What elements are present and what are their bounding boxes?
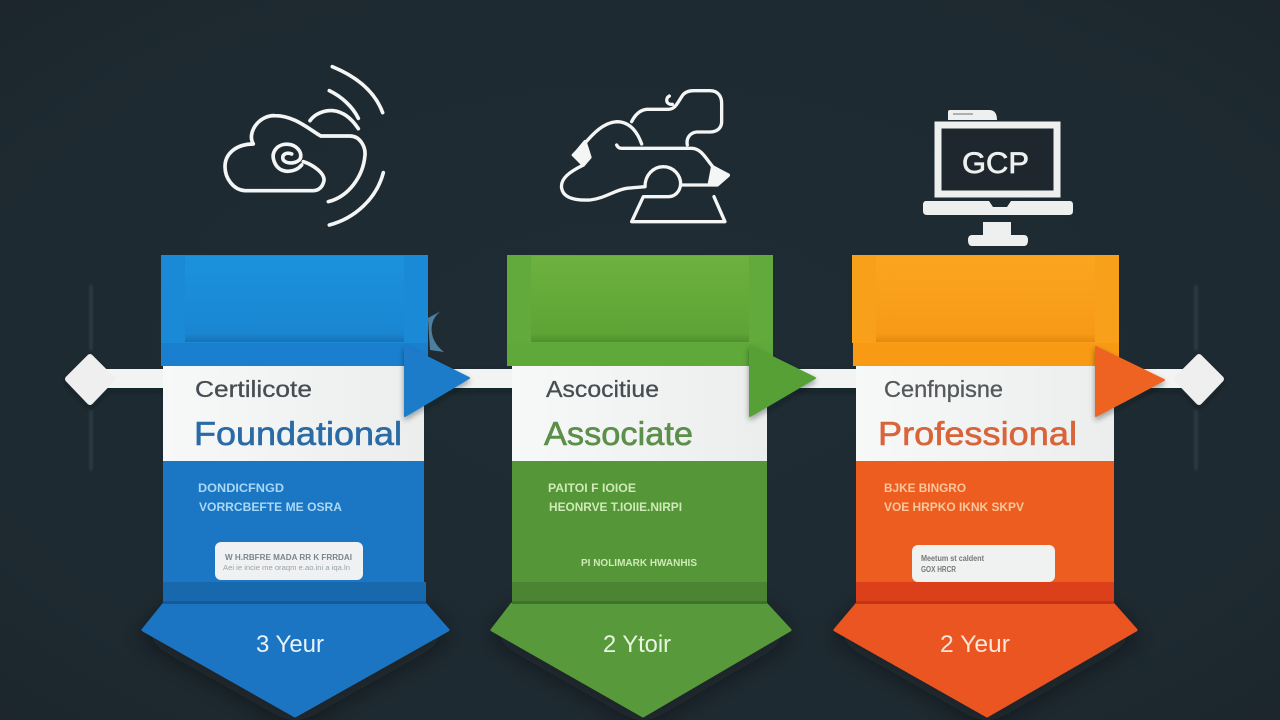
- note box: Aei ie incie me oraqm e.ao.ini a iqa.ln: [223, 565, 350, 572]
- arrow banner: 2 Year: 2 Ytoir: [603, 631, 671, 658]
- white label: [856, 366, 1114, 461]
- white label: [512, 366, 767, 461]
- monitor stand: [968, 222, 1028, 246]
- card: Foundational: VORRCBEFTE ME OSRA: [199, 500, 342, 514]
- level name: Foundational: [194, 415, 402, 452]
- arrow connector: [750, 346, 815, 416]
- description text: PAITOI F IOIOE: [548, 481, 636, 495]
- subtitle: Ascocitiue: [546, 376, 659, 402]
- arrow banner: 2 Year: 2 Yeur: [940, 631, 1010, 658]
- arrow banner: 2 Year: [835, 604, 1136, 716]
- description text: BJKE BINGRO: [884, 481, 966, 495]
- subtitle: Certilicote: [195, 376, 312, 402]
- lower panel: [512, 461, 767, 582]
- icon: abstract cloud and pedestal: [561, 91, 728, 222]
- icon: cloud with signal arcs: [225, 67, 383, 225]
- card: Foundational: [143, 255, 469, 716]
- card: Professional: [835, 255, 1164, 716]
- note text: PI NOLIMARK HWANHIS: [581, 558, 697, 569]
- top panel: [161, 255, 428, 343]
- note box: GOX HRCR: [921, 565, 956, 574]
- arrow banner: 3 Year: [143, 604, 448, 716]
- card: Professional: VOE HRPKO IKNK SKPV: [884, 500, 1024, 514]
- arrow banner: 3 Year: 3 Yeur: [256, 631, 324, 658]
- lower panel: [163, 461, 424, 582]
- laptop base: [923, 201, 1073, 215]
- note box: [215, 542, 363, 580]
- top panel: [507, 255, 773, 343]
- white label: [163, 366, 424, 461]
- monitor screen: [938, 125, 1057, 194]
- icon tab: [948, 110, 997, 120]
- level name: Professional: [878, 415, 1077, 452]
- icon: GCP laptop monitor: [923, 110, 1073, 246]
- note box: [912, 545, 1055, 582]
- screen label: GCP: [962, 147, 1029, 180]
- note box: Meetum st caldent: [921, 554, 984, 563]
- description text: DONDICFNGD: [198, 481, 284, 495]
- arrow connector: [1096, 347, 1164, 416]
- top panel: [852, 255, 1119, 343]
- card: Associate: [492, 255, 815, 716]
- arrow banner: 2 Year: [492, 604, 790, 716]
- timeline bar with end diamonds: [68, 357, 1221, 402]
- lower panel: [856, 461, 1114, 582]
- arrow connector: [405, 346, 469, 416]
- card: Associate: HEONRVE T.IOIIE.NIRPI: [549, 500, 682, 514]
- subtitle: Cenfnpisne: [884, 376, 1003, 402]
- level name: Associate: [544, 415, 693, 452]
- note box: W H.RBFRE MADA RR K FRRDAI: [225, 553, 352, 562]
